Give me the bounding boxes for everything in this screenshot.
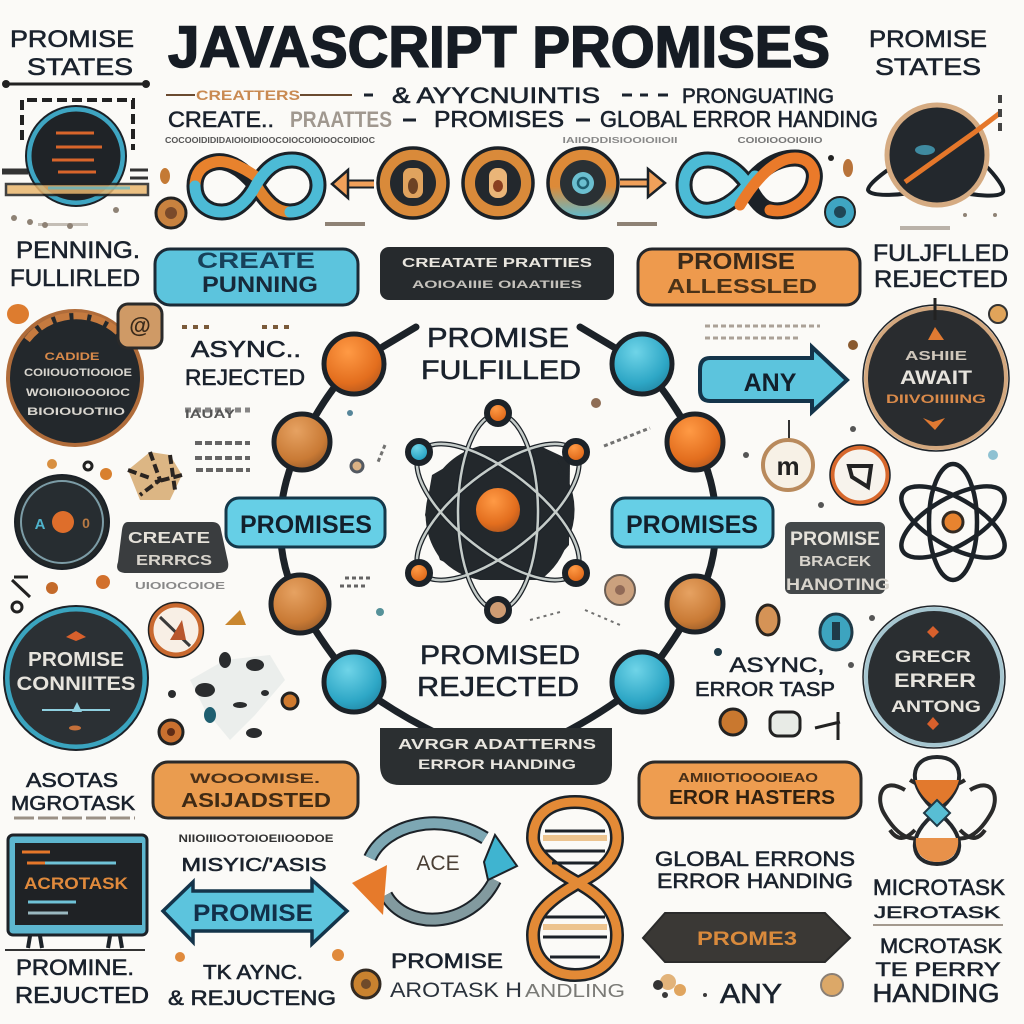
text: misync: MISYIC/'ASIS	[182, 855, 326, 875]
text: promised rejected	[417, 640, 580, 702]
pill: error hasters: EROR HASTERS	[669, 787, 835, 809]
subtitle text block	[165, 83, 878, 145]
panel: create errors: ERRRCS	[136, 552, 212, 569]
panel: promise error handling: BRACEK	[799, 553, 871, 570]
badge: error await right: ERRER	[894, 671, 976, 692]
icon: prohibited sign	[148, 602, 204, 658]
arrow: any: ANY	[744, 369, 797, 397]
badge: error await right	[863, 606, 1005, 748]
arrow: promise double	[163, 880, 347, 944]
text: promine rejected: REJUCTED	[15, 982, 149, 1008]
pill: promises left	[226, 498, 385, 547]
text: microtask: MICROTASK	[873, 875, 1005, 900]
subtitle text block: GLOBAL ERROR HANDING	[600, 106, 878, 132]
text: microtask	[872, 875, 1005, 1008]
text: async rejecting: TK AYNC.	[203, 962, 303, 984]
badge: dark circle left: COIIOUOTIOOIOE	[24, 367, 132, 379]
badge: promet: PROME3	[697, 929, 797, 950]
subtitle text block: PRONGUATING	[682, 85, 834, 108]
text: misync	[178, 833, 334, 875]
pill: promise allsettled bottom left: WOOOMISE.	[190, 770, 320, 786]
heading: promise states left	[10, 26, 134, 81]
icon: atom right	[891, 464, 1015, 580]
pill: promise allsettled bottom left: ASIJADSTED	[181, 790, 331, 812]
text: global errons	[655, 848, 855, 893]
pill: create punning: PUNNING	[202, 272, 318, 297]
pill: promise allsettled: PROMISE	[677, 248, 795, 274]
badge: dark circle left: @	[129, 313, 151, 338]
icon: dna helix	[533, 802, 617, 975]
pill: create practices dark: CREATATE PRATTIES	[402, 255, 592, 270]
text: asotas mrotask: ASOTAS	[26, 770, 118, 792]
text: asotas mrotask	[11, 770, 136, 818]
panel: avrgr adatterns dark pill	[380, 728, 612, 785]
badge: await: DIIVOIIIIING	[886, 392, 986, 406]
title: JAVASCRIPT PROMISES	[168, 15, 830, 80]
subtitle text block: CREATTERS	[196, 87, 300, 103]
icon: race cycle arrows: ACE	[416, 852, 460, 875]
badge: promise connites: CONNIITES	[16, 674, 136, 695]
pill: create practices dark: AOIOAIIIE OIAATIIES	[412, 279, 582, 291]
text: async rejected: REJECTED	[185, 365, 305, 390]
arrow: coins to right	[620, 169, 665, 197]
text: global errons: GLOBAL ERRONS	[655, 848, 855, 871]
text: small caption left: IAUAY	[185, 407, 235, 421]
text: promised rejected: PROMISED	[420, 640, 580, 670]
text: promine rejected: PROMINE.	[16, 955, 134, 980]
text: microtask: JEROTASK	[874, 903, 1001, 922]
arrow: promise double: PROMISE	[193, 900, 313, 927]
icon: infinity right	[684, 158, 814, 211]
icon: m badge	[763, 420, 813, 490]
text: promise fulfilled	[421, 322, 581, 385]
icon: race cycle arrows	[352, 823, 517, 920]
panel: avrgr adatterns dark pill: AVRGR ADATTERNS	[398, 736, 596, 753]
pill: promise allsettled bottom left	[153, 762, 358, 818]
subtitle text block: & AYYCNUINTIS	[392, 83, 600, 108]
text: promise fulfilled: FULFILLED	[421, 355, 581, 385]
text: promise arotask handling: AROTASK H	[390, 979, 522, 1002]
pill: promises right	[612, 498, 773, 547]
text: fulfilled rejected: FULJFLLED	[873, 240, 1009, 267]
text: async rejecting: & REJUCTENG	[168, 987, 336, 1010]
panel: create errors	[117, 522, 228, 592]
pill: promise allsettled: ALLESSLED	[667, 276, 817, 298]
text: promised rejected: REJECTED	[417, 671, 579, 702]
text: penning fulfilled	[10, 237, 140, 292]
text: penning fulfilled: FULLIRLED	[10, 265, 140, 292]
text: promise arotask handling: PROMISE	[391, 950, 503, 973]
icon: coin 3	[548, 148, 618, 218]
heading: promise states right: PROMISE	[869, 26, 987, 53]
pill: promises left: PROMISES	[240, 511, 372, 539]
badge: await	[863, 298, 1009, 451]
text: microtask: HANDING	[872, 978, 1000, 1008]
badge: await: AWAIT	[900, 368, 972, 389]
icon: circle badge left middle: A	[35, 516, 46, 533]
subtitle text block: IAIIODDISIOOIOIIOII	[562, 136, 678, 145]
noise: specks around atom	[340, 398, 650, 625]
icon: infinity left	[195, 160, 318, 212]
icon: terminal badge left	[2, 80, 150, 206]
text: async rejected	[182, 327, 305, 410]
text: async error right: ASYNC,	[730, 654, 824, 677]
panel: avrgr adatterns dark pill: ERROR HANDING	[418, 756, 576, 772]
text: async error right	[695, 654, 835, 701]
heading: promise states left: PROMISE	[10, 26, 134, 53]
text: fulfilled rejected: REJECTED	[874, 266, 1008, 293]
text: promise fulfilled: PROMISE	[427, 322, 569, 353]
pill: error hasters: AMIIOTIOOOIEAO	[678, 770, 818, 785]
heading: promise states right: STATES	[875, 54, 981, 81]
subtitle text block: PROMISES	[434, 106, 564, 132]
badge: error await right: ANTONG	[891, 697, 981, 716]
icon: coin 1	[378, 148, 448, 218]
heading: promise states left: STATES	[27, 54, 133, 81]
icon: central atom	[396, 402, 600, 621]
subtitle text block: CREATE..	[168, 107, 274, 132]
text: async rejecting	[168, 949, 344, 1010]
badge: dark circle left: WOIIOIIOOOIOC	[26, 387, 130, 399]
panel: promise error handling: HANOTING	[786, 575, 890, 594]
icon: small blue dot right	[825, 155, 855, 227]
badge: await: ASHIIE	[905, 348, 967, 363]
icon: small glyph cluster bottom center	[653, 974, 843, 998]
arrow: any	[700, 347, 847, 412]
icon: scattered gears left	[128, 452, 182, 500]
subtitle text block: COIOIOOOIOIIO	[738, 136, 822, 145]
central ring	[280, 327, 716, 735]
text: any bottom: ANY	[720, 978, 782, 1009]
text: promise arotask handling: ANDLING	[525, 981, 625, 1001]
panel: create errors: CREATE	[128, 530, 210, 547]
noise: small marks row under top icons	[11, 207, 997, 230]
panel: promise error handling: PROMISE	[790, 529, 880, 550]
arrow: left to coins	[332, 170, 374, 198]
subtitle text block: COCOOIDIDIDAIOIOIDIOOCOIOCOIOIOOCOIDIOC	[165, 136, 375, 145]
icon: planet badge right	[868, 95, 1003, 205]
panel: promise error handling	[785, 522, 890, 594]
text: asotas mrotask: MGROTASK	[11, 793, 136, 815]
text: global errons: ERROR HANDING	[657, 870, 853, 893]
pill: create practices dark	[380, 247, 614, 300]
icon: circle badge left middle: 0	[82, 515, 90, 531]
pill: error hasters	[639, 762, 861, 818]
text: misync: NIIOIIIOOTOIOEIIOODOE	[178, 833, 334, 845]
panel: create errors: UIOIOCOIOE	[135, 581, 225, 592]
icon: orange ring badge	[830, 445, 890, 505]
ring nodes	[271, 334, 723, 712]
panel: monitor acrotask: ACROTASK	[24, 874, 129, 893]
heading: promise states right	[869, 26, 987, 81]
noise: specks right side	[705, 326, 998, 740]
badge: promet	[643, 913, 850, 962]
pill: promise allsettled	[638, 248, 860, 305]
badge: promise connites: PROMISE	[28, 649, 124, 671]
icon: small orange dot left	[156, 168, 186, 228]
badge: promise connites	[4, 606, 148, 750]
text: microtask: MCROTASK	[880, 935, 1002, 958]
panel: monitor acrotask	[5, 835, 147, 950]
text: penning fulfilled: PENNING.	[16, 237, 140, 264]
icon: hourglass atom	[880, 757, 995, 864]
pill: create punning: CREATE	[197, 248, 315, 273]
badge: dark circle left: CADIDE	[44, 351, 100, 363]
badge: dark circle left	[7, 304, 162, 445]
text: microtask: TE PERRY	[876, 960, 1001, 981]
text: promine rejected	[15, 955, 149, 1008]
icon: scattered sketch center left	[12, 443, 298, 744]
text: fulfilled rejected	[873, 240, 1009, 293]
subtitle text block: PRAATTES	[290, 107, 392, 132]
badge: error await right: GRECR	[895, 647, 971, 666]
icon: circle badge left middle	[15, 475, 109, 569]
pill: promises right: PROMISES	[626, 511, 758, 539]
text: promise arotask handling	[352, 950, 625, 1002]
badge: dark circle left: BIOIOUOTIIO	[27, 406, 126, 418]
text: async error right: ERROR TASP	[695, 679, 835, 701]
pill: create punning	[155, 248, 358, 305]
icon: m badge: m	[776, 451, 800, 481]
icon: coin 2	[463, 148, 533, 218]
text: async rejected: ASYNC..	[191, 336, 301, 362]
